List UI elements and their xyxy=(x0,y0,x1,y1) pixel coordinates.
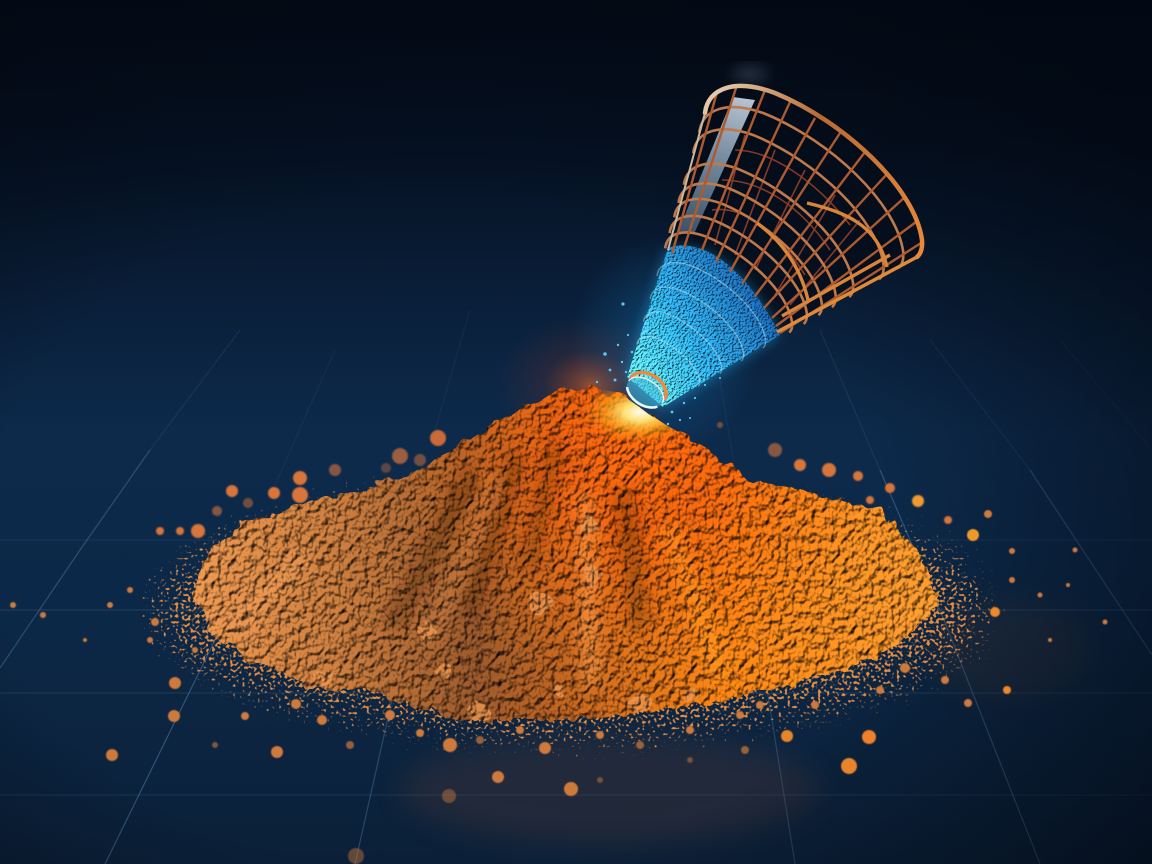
funnel tip nozzle xyxy=(621,366,672,415)
wire mesh rings xyxy=(665,107,903,333)
blue particle cone xyxy=(627,245,780,407)
wire mesh spokes xyxy=(672,85,921,333)
funnel glass highlight xyxy=(678,97,755,234)
floor grid xyxy=(0,310,1152,864)
thick copper inner arcs xyxy=(757,203,890,316)
powder mound xyxy=(193,380,940,723)
blue cone faint rings xyxy=(637,262,766,386)
funnel dark interior xyxy=(668,86,922,332)
funnel rim xyxy=(705,86,922,257)
funnel xyxy=(621,85,922,415)
scattered powder speckles xyxy=(100,445,1040,775)
peak highlight xyxy=(584,390,678,442)
mound lumps xyxy=(312,514,700,721)
mound body with ridges and lumps xyxy=(193,387,940,723)
funnel right edge xyxy=(777,257,917,332)
foreground particles xyxy=(10,510,1108,864)
funnel left edge xyxy=(668,113,705,250)
out-of-focus particles behind mound xyxy=(156,422,952,538)
blue sparks around nozzle xyxy=(596,302,721,425)
blue cone glow xyxy=(627,249,778,407)
funnel back-wall reflections xyxy=(712,135,860,305)
glow behind mound peak xyxy=(495,66,768,455)
